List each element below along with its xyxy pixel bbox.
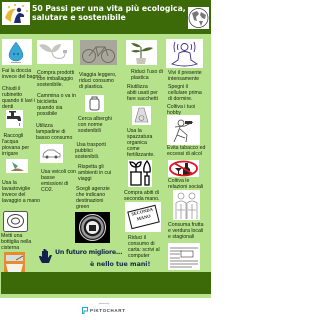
- stamp text: [127, 205, 160, 229]
- stamp text: MANO: [136, 213, 151, 222]
- text: riduci carta: [128, 235, 160, 259]
- text: spazzatura organica: fertilizzante.: [127, 152, 155, 158]
- text: chiudi il rubinetto: denti: [2, 104, 13, 110]
- text: relazioni sociali: [168, 178, 203, 190]
- text: abiti seconda mano: seconda mano.: [124, 196, 159, 202]
- text: raccogli l'acqua: [2, 133, 29, 157]
- text: rispetta: ambienti in cui: [78, 170, 111, 176]
- text: cerca alberghi: [78, 116, 112, 134]
- text: viaggia leggero: di plastica.: [79, 84, 104, 90]
- text: trasporti: [75, 142, 106, 160]
- text: cammina: possibile: [37, 111, 57, 117]
- text: metti una bottiglia: Metti una: [1, 233, 22, 239]
- text: compra prodotti: sostenibile.: [37, 82, 63, 88]
- piktochart credit: [80, 303, 132, 317]
- green background panel: [0, 33, 211, 298]
- icon: seedling: [126, 40, 157, 65]
- text: spazzatura organica: [127, 128, 155, 158]
- text: agenzie: green: [76, 204, 89, 210]
- text: evita tabacco: [167, 145, 205, 157]
- title: 50 Passi per una vita più ecologica,: [32, 4, 186, 13]
- text: spazzatura organica: come: [127, 146, 140, 152]
- text: riutilizza: abiti usati per: [127, 90, 158, 96]
- text: agenzie: che indicano: [76, 192, 105, 198]
- text: rispetta: [78, 164, 111, 182]
- text: riduci carta: consumo di: [128, 241, 155, 247]
- text: fai la doccia: invece del bagno: [2, 74, 41, 80]
- text: raccogli l'acqua: irrigare: [2, 151, 18, 157]
- text: abiti seconda mano: [124, 190, 159, 202]
- text: metti una bottiglia: cisterna: [1, 245, 19, 251]
- text: evita tabacco: eccessi di alcol: [167, 151, 202, 157]
- text: raccogli l'acqua: l'acqua: [2, 139, 18, 145]
- icon: backpack: [85, 95, 104, 112]
- icon: people logo: [2, 2, 30, 25]
- icon: watering: [6, 159, 28, 173]
- text: spegni il cellulare: [168, 84, 202, 102]
- text: metti una bottiglia: [1, 233, 32, 251]
- text: fai la doccia: [2, 68, 41, 80]
- text: cerca alberghi: Cerca alberghi: [78, 116, 112, 122]
- header band: [0, 0, 211, 34]
- text: agenzie: destinazioni: [76, 198, 103, 204]
- text: riutilizza: [127, 84, 158, 102]
- text: compra prodotti: [37, 70, 74, 88]
- text: riutilizza: Riutilizza: [127, 84, 148, 90]
- text: chiudi il rubinetto: quando ti lavi i: [2, 98, 35, 104]
- text: viaggia leggero: Viaggia leggero,: [79, 72, 116, 78]
- text: spazzatura organica: organica: [127, 140, 147, 146]
- powered by: powered by: [99, 303, 109, 305]
- text: cammina: bicicletta: [37, 99, 57, 105]
- text: metti una bottiglia: bottiglia nella: [1, 239, 31, 245]
- text: riduci carta: computer: [128, 253, 150, 259]
- footer band: [1, 272, 211, 294]
- text: raccogli l'acqua: Raccogli: [3, 133, 23, 139]
- text: frutta e verdura: e stagionali: [168, 234, 194, 240]
- text: frutta e verdura: Consuma frutta: [168, 222, 203, 228]
- text: rispetta: viaggi: [78, 176, 92, 182]
- text: usa la lavastoviglie: lavaggio a mano: [2, 198, 40, 204]
- icon: globe: [188, 7, 209, 29]
- text: relazioni sociali: relazioni sociali: [168, 184, 203, 190]
- text: lampadine: lampadine di: [36, 129, 65, 135]
- icon: no alcohol: [168, 160, 199, 177]
- text: riutilizza: fare sacchetti: [127, 96, 158, 102]
- text: usa la lavastoviglie: lavastoviglie: [2, 186, 30, 192]
- icon: black badge: [75, 212, 110, 243]
- text: spegni il cellulare: cellulare prima: [168, 90, 202, 96]
- text: chiudi il rubinetto: Chiudi il: [2, 86, 20, 92]
- text: spegni il cellulare: di dormire.: [168, 96, 193, 102]
- text: trasporti: pubblici: [75, 148, 93, 154]
- text: usa la lavastoviglie: [2, 180, 40, 204]
- title: [32, 4, 186, 22]
- text: coltiva hobby: hobby: [167, 110, 181, 116]
- text: compra prodotti: Compra prodotti: [37, 70, 74, 76]
- text: spazzatura organica: Usa la: [127, 128, 142, 134]
- text: riduci plastica: [131, 69, 163, 81]
- text: spazzatura organica: spazzatura: [127, 134, 152, 140]
- text: cammina: [37, 93, 76, 117]
- text: usa la lavastoviglie: Usa la: [2, 180, 17, 186]
- icon: piktochart mark: [82, 307, 88, 314]
- text: usa la lavastoviglie: invece del: [2, 192, 25, 198]
- text: compra prodotti: con imballaggio: [37, 76, 73, 82]
- text: agenzie: Scegli agenzie: [76, 186, 110, 192]
- slogan line 1: Un futuro migliore...: [55, 249, 122, 256]
- text: chiudi il rubinetto: [2, 86, 35, 110]
- text: raccogli l'acqua: piovana per: [2, 145, 29, 151]
- icon: water drop: [2, 39, 32, 65]
- text: viaggia leggero: [79, 72, 116, 90]
- icon: hand: [39, 248, 52, 264]
- icon: compost bag: [132, 106, 151, 125]
- text: vivi il presente: intensamente: [168, 76, 199, 82]
- text: trasporti: Usa trasporti: [76, 142, 106, 148]
- text: agenzie: [76, 186, 110, 210]
- text: lampadine: basso consumo: [36, 135, 72, 141]
- slogan line 2: è nello tue mani!: [90, 261, 150, 268]
- text: coltiva hobby: Coltiva i tuoi: [167, 104, 195, 110]
- text: cammina: quando sia: [37, 105, 62, 111]
- text: evita tabacco: Evita tabacco ed: [167, 145, 205, 151]
- text: riduci carta: Riduci il: [128, 235, 146, 241]
- text: abiti seconda mano: Compra abiti di: [124, 190, 159, 196]
- text: cerca alberghi: con norme: [78, 122, 103, 128]
- title: salutare e sostenibile: [32, 13, 126, 22]
- icon: faucet: [6, 110, 23, 128]
- icon: cistern: [3, 211, 28, 232]
- wordmark: PIKTOCHART: [90, 308, 125, 313]
- text: lampadine: Utilizza: [36, 123, 53, 129]
- text: spegni il cellulare: Spegni il: [168, 84, 188, 90]
- text: veicoli: [41, 169, 76, 193]
- text: frutta e verdura: [168, 222, 203, 240]
- icon: meditation: [166, 39, 203, 68]
- text: vivi il presente: [168, 70, 202, 82]
- text: cammina: Cammina o va in: [37, 93, 76, 99]
- stamp text: SECONDA: [131, 207, 153, 217]
- text: vivi il presente: Vivi il presente: [168, 70, 202, 76]
- text: veicoli: basse: [41, 175, 55, 181]
- icon: friends: [173, 190, 200, 220]
- text: chiudi il rubinetto: rubinetto: [2, 92, 22, 98]
- icon: leaf and plug: [37, 40, 73, 64]
- icon: car: [40, 144, 63, 163]
- image: newspaper: [168, 243, 200, 270]
- text: veicoli: CO2.: [41, 187, 53, 193]
- text: rispetta: Rispetta gli: [78, 164, 104, 170]
- text: riduci plastica: plastica: [131, 75, 149, 81]
- text: fai la doccia: Fai la doccia: [2, 68, 31, 74]
- icon: photographer: [167, 115, 200, 145]
- icon: pot and trowel: [128, 160, 152, 187]
- text: coltiva hobby: [167, 104, 195, 116]
- text: lampadine: [36, 123, 72, 141]
- text: veicoli: Usa veicoli con: [41, 169, 76, 175]
- text: cerca alberghi: sostenibili: [78, 128, 101, 134]
- text: riduci carta: carta: scrivi al: [128, 247, 160, 253]
- icon: bicycle photo: [80, 40, 117, 65]
- icon: stamp seconda mano: [125, 202, 161, 232]
- text: relazioni sociali: Coltiva le: [168, 178, 189, 184]
- text: viaggia leggero: riduci consumo: [79, 78, 114, 84]
- text: trasporti: sostenibili.: [75, 154, 99, 160]
- text: frutta e verdura: e verdura locali: [168, 228, 203, 234]
- image: orange washbasin: [4, 252, 25, 272]
- text: riduci plastica: Riduci l'uso di: [131, 69, 163, 75]
- text: veicoli: emissioni di: [41, 181, 68, 187]
